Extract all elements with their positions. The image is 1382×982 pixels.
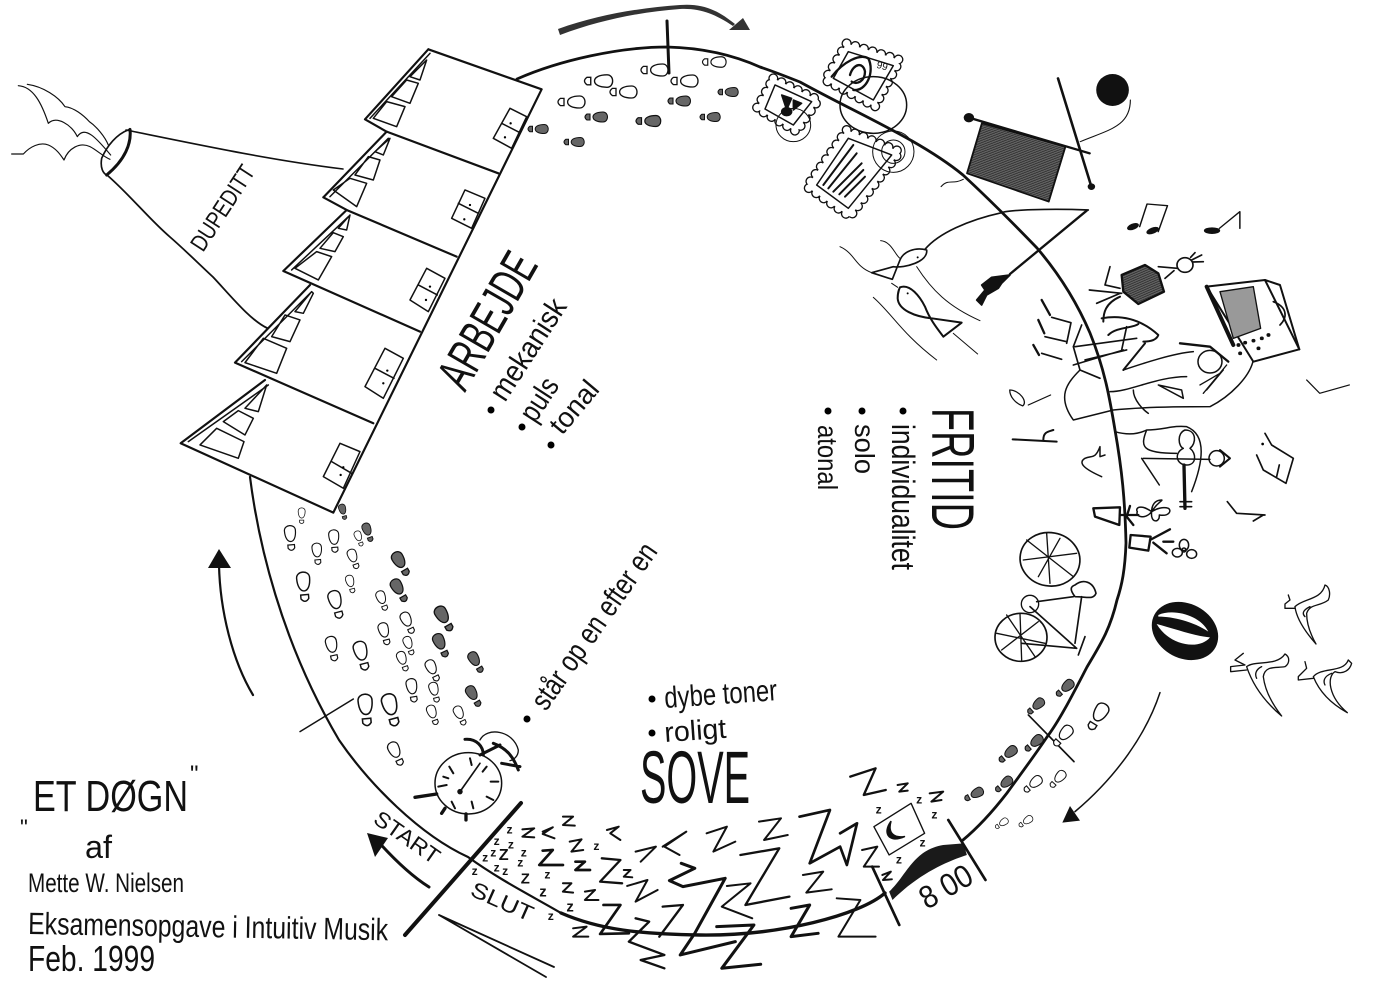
note: står op en efter en: står op en efter en bbox=[525, 537, 664, 716]
heading: SOVE: SOVE bbox=[640, 736, 750, 819]
small sleep letters: z bbox=[472, 864, 478, 878]
author name: Mette W. Nielsen bbox=[28, 868, 184, 898]
icon: flowers in pots bbox=[1093, 500, 1197, 558]
small sleep letters: z bbox=[508, 837, 514, 851]
funnel mouth bbox=[12, 84, 130, 175]
list: work qualities: puls bbox=[513, 371, 566, 428]
panel: lower-right pictograms bbox=[995, 528, 1352, 823]
list: leisure qualities: solo bbox=[849, 424, 880, 474]
icon: footprints at top bbox=[528, 57, 738, 146]
icon: ball bbox=[1142, 591, 1228, 671]
icon: flag and stick bbox=[941, 78, 1130, 202]
list: work qualities: tonal bbox=[543, 374, 605, 440]
list: sleep qualities: roligt bbox=[663, 713, 727, 748]
icon: music notes bbox=[1127, 204, 1240, 235]
panel: music room figures bbox=[1065, 253, 1299, 420]
panel: guitar player and flowers bbox=[1013, 426, 1293, 558]
small sleep letters: z bbox=[896, 852, 902, 866]
panel: work buildings bbox=[181, 49, 542, 513]
arrow: top clockwise arrow bbox=[558, 5, 750, 35]
panel: flag, stick and notes bbox=[941, 74, 1349, 406]
black night-to-morning stroke bbox=[889, 843, 967, 900]
icon: birds bbox=[1231, 585, 1352, 716]
list: sleep qualities: dybe toner bbox=[663, 674, 778, 715]
top tick mark bbox=[667, 21, 669, 73]
icon: yarn ball bbox=[1096, 74, 1129, 106]
icon: stamps bbox=[757, 43, 914, 217]
author: af: af bbox=[85, 829, 112, 865]
arrow: start bbox=[367, 833, 429, 887]
icon: leaf and small marks bbox=[1010, 380, 1349, 406]
title: ET DØGN: " bbox=[20, 815, 28, 840]
title: ET DØGN: " bbox=[190, 761, 199, 788]
stamp value: 99 bbox=[875, 60, 889, 74]
stamp perforation edges bbox=[757, 43, 900, 217]
small sleep letters: z bbox=[876, 802, 882, 816]
icon: small marks bbox=[1013, 430, 1293, 521]
label: START: START bbox=[369, 806, 445, 869]
building doors bbox=[323, 108, 527, 488]
icon: bicycle bbox=[995, 528, 1096, 661]
small sleep letters: z bbox=[593, 839, 599, 853]
icon: moon in box bbox=[874, 803, 925, 855]
small sleep letters: z bbox=[920, 836, 926, 850]
wedge lines below start bbox=[439, 915, 554, 977]
title: ET DØGN: ET DØGN bbox=[33, 772, 188, 821]
time dividers bbox=[872, 820, 985, 925]
small sleep letters bbox=[472, 792, 937, 923]
list: work qualities bbox=[483, 292, 605, 448]
icon: guitar player bbox=[1115, 426, 1230, 508]
small tick on circle bbox=[300, 699, 353, 732]
small sleep letters: z bbox=[566, 900, 574, 916]
small sleep letters: z bbox=[507, 822, 513, 836]
note: står op en efter en bbox=[524, 537, 664, 722]
icon: fishing rod and fish bbox=[840, 209, 1088, 360]
list: sleep qualities bbox=[648, 674, 778, 748]
list: work qualities: mekanisk bbox=[483, 292, 574, 407]
list: leisure qualities: individualitet bbox=[885, 424, 921, 570]
icon: television bbox=[1207, 280, 1299, 362]
list: leisure qualities: atonal bbox=[812, 425, 843, 490]
building outlines bbox=[181, 49, 542, 513]
icon: alarm clock bbox=[415, 732, 520, 820]
small sleep letters: z bbox=[548, 909, 554, 923]
date: Feb. 1999 bbox=[28, 938, 155, 979]
panel: left footprints and clock bbox=[284, 503, 520, 820]
icon: dupeditt funnel and wings bbox=[12, 84, 343, 328]
icon: drummer bbox=[1073, 253, 1203, 378]
start divider line bbox=[405, 803, 521, 935]
main day circle bbox=[250, 47, 1126, 935]
small sleep letters: z bbox=[544, 867, 550, 881]
label: DUPEDITT: DUPEDITT bbox=[185, 160, 261, 256]
small sleep letters: z bbox=[482, 851, 488, 865]
heading: FRITID: FRITID bbox=[919, 408, 986, 530]
arrow: clockwise lower right bbox=[1062, 693, 1160, 823]
icon: sleep zigzags bbox=[472, 768, 985, 968]
small sleep letters: z bbox=[916, 792, 922, 806]
label: 8.00 time: 8 00 bbox=[912, 857, 979, 916]
subtitle: exam assignment: Eksamensopgave i Intuitiv Musik bbox=[28, 906, 389, 947]
small sleep letters: z bbox=[931, 807, 937, 821]
icon: woman on sofa bbox=[1065, 343, 1253, 420]
arrow: upward left arrow bbox=[208, 549, 253, 695]
small sleep letters: z bbox=[517, 856, 523, 870]
diagonal divider mark bbox=[1028, 715, 1074, 762]
small sleep letters: z bbox=[490, 846, 496, 860]
stamp pictures bbox=[765, 52, 914, 208]
small sleep letters: z bbox=[521, 846, 527, 860]
label: SLUT: SLUT bbox=[467, 877, 537, 926]
icon: footprints left cluster bbox=[284, 503, 486, 767]
title: ET DØGN bbox=[20, 761, 199, 840]
list: leisure qualities bbox=[812, 408, 921, 570]
small sleep letters: Z bbox=[499, 846, 509, 864]
small sleep letters: z bbox=[494, 834, 500, 848]
small sleep letters: z bbox=[539, 885, 547, 901]
small sleep letters: Z bbox=[521, 871, 530, 887]
small sleep letters: z bbox=[502, 864, 508, 878]
heading: ARBEJDE: ARBEJDE bbox=[426, 242, 549, 398]
building windows bbox=[188, 53, 430, 458]
icon: footprints lower right bbox=[963, 678, 1111, 830]
small sleep letters: z bbox=[494, 861, 500, 875]
